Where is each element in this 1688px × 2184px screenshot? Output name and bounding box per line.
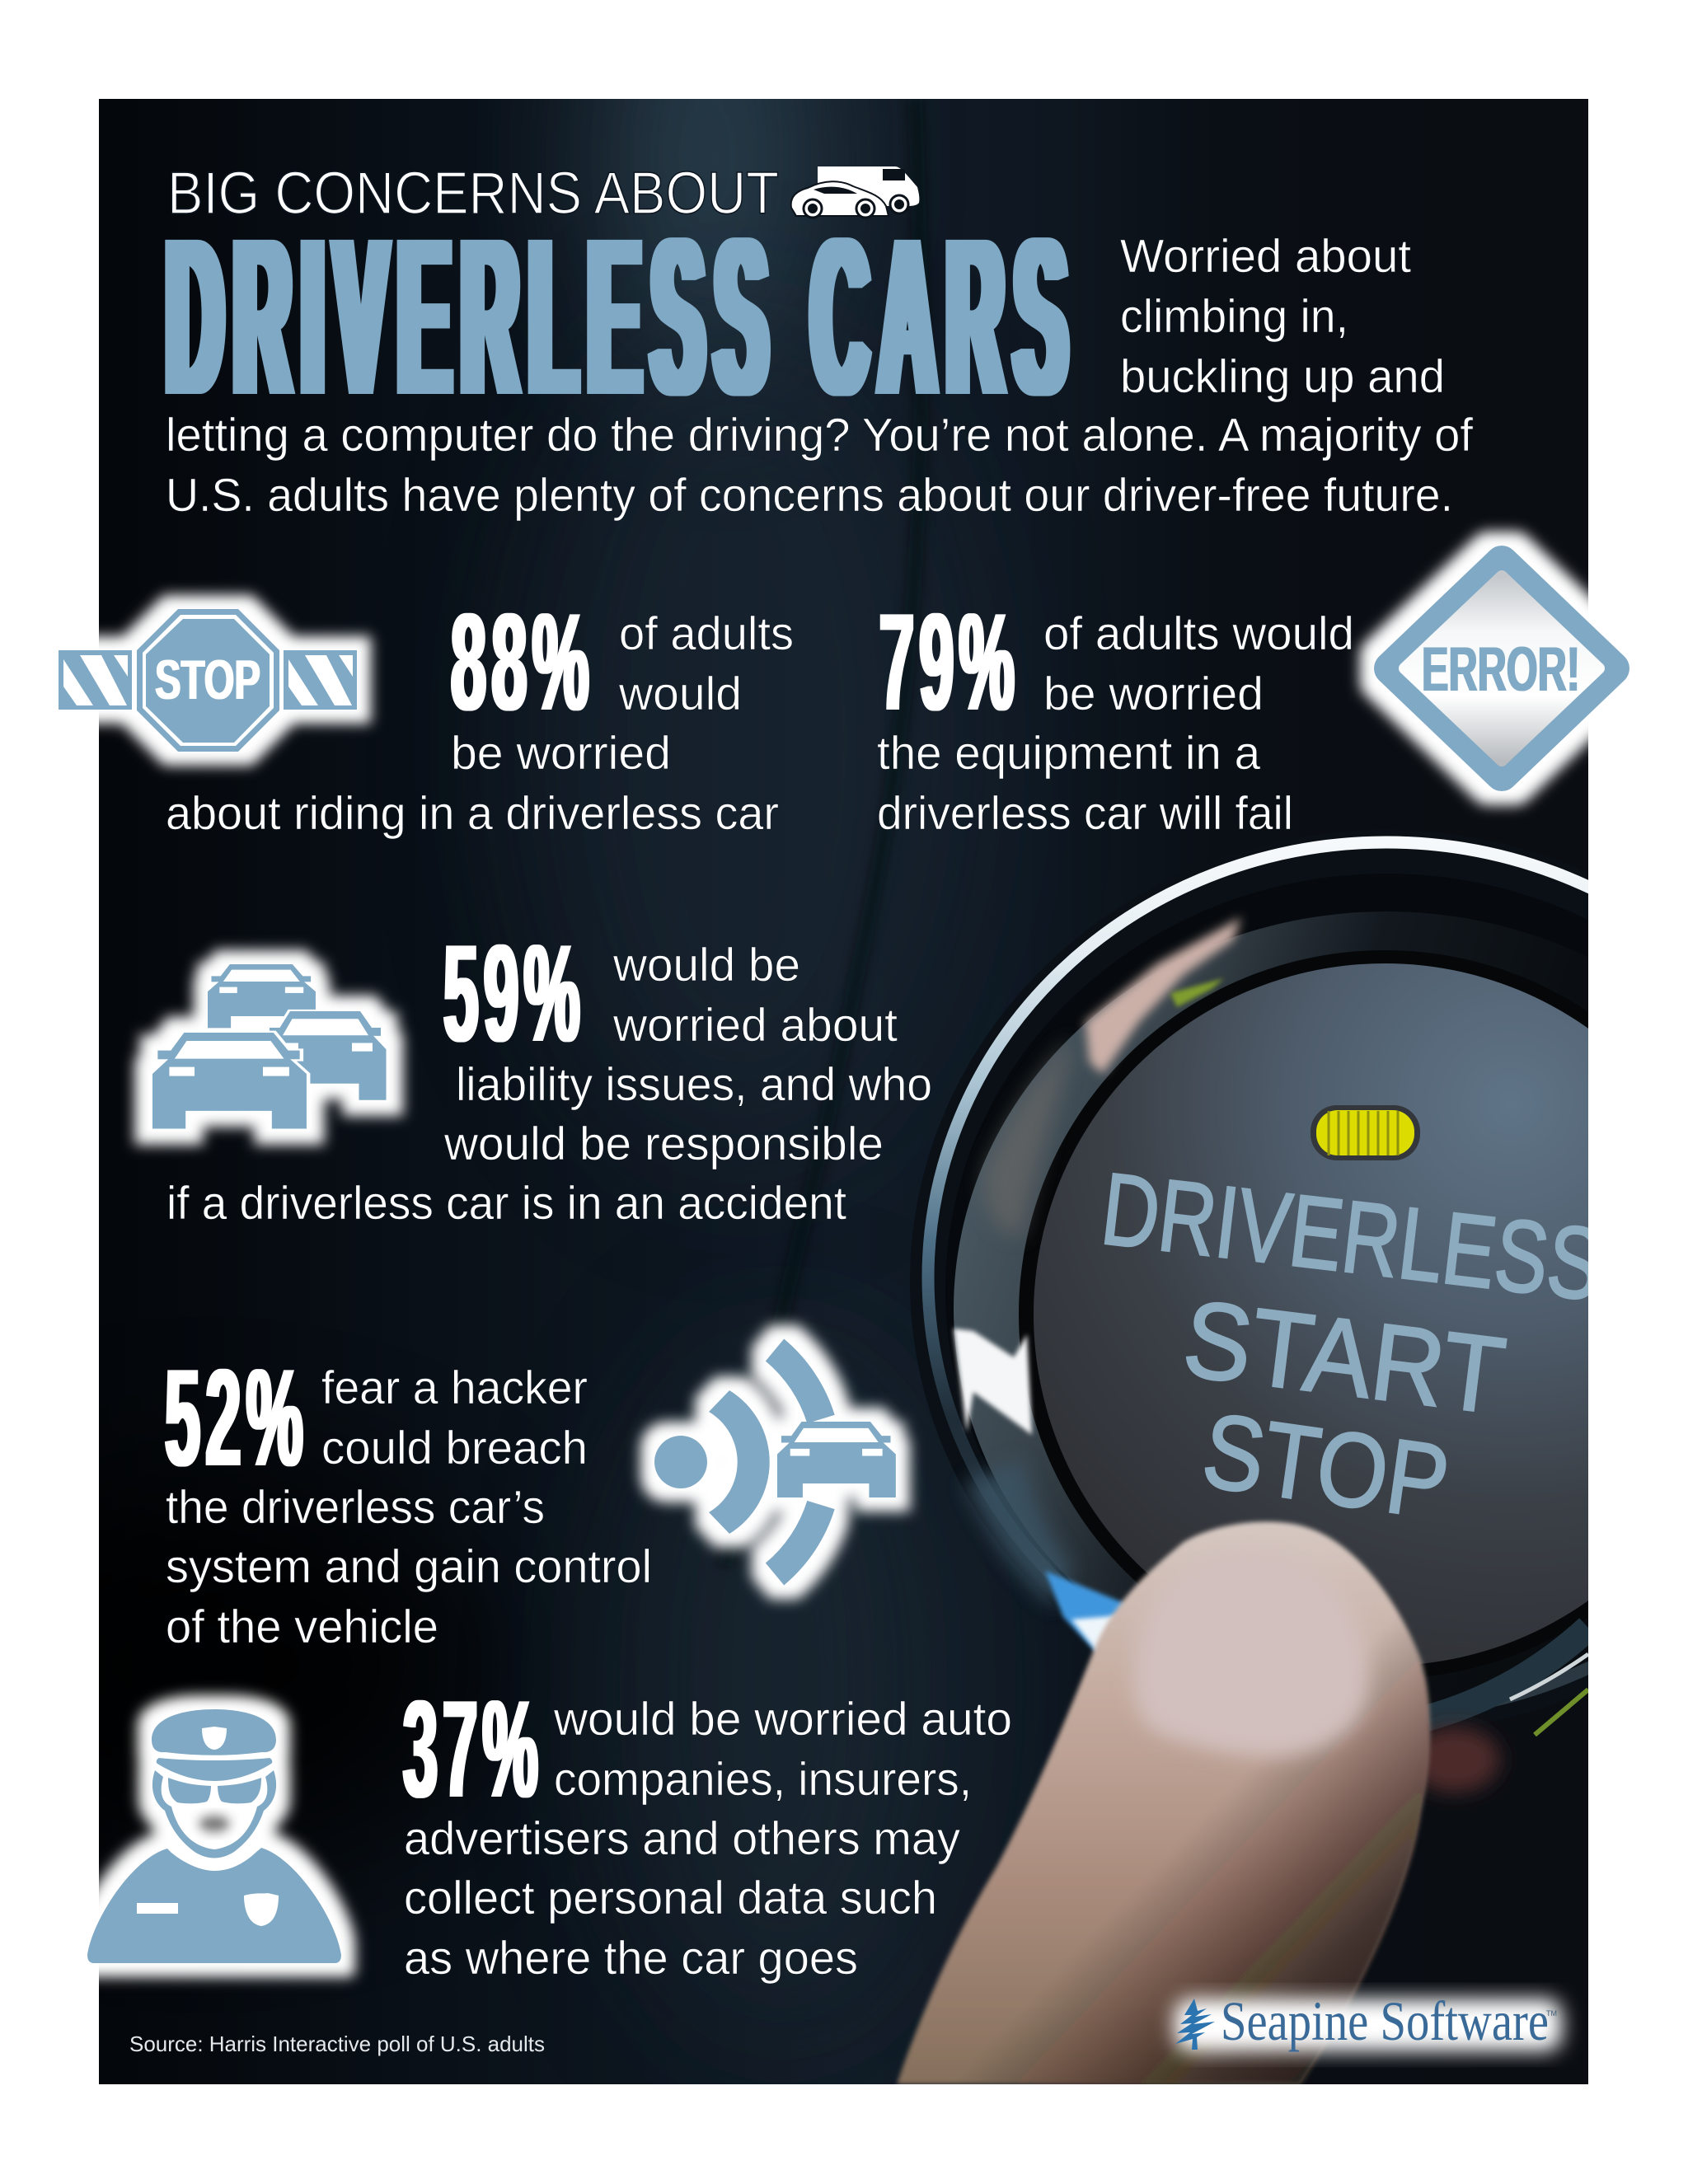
stat: 52 percent: the driverless car’s xyxy=(166,1481,545,1534)
stat: 37 percent: would be worried auto xyxy=(553,1693,1012,1746)
icon: error diamond sign xyxy=(1390,562,1613,775)
logo: Seapine Software: Seapine Software xyxy=(1221,1990,1549,2052)
stat: 88 percent: would xyxy=(618,668,742,720)
stat: 79 percent: be worried xyxy=(1043,668,1264,720)
stat: 88 percent: 88% xyxy=(451,584,594,739)
stat: 37 percent: advertisers and others may xyxy=(404,1812,960,1865)
stat: 79 percent: driverless car will fail xyxy=(877,787,1293,840)
stat: 59 percent: if a driverless car is in an accident xyxy=(166,1177,846,1230)
icon: stop sign with barriers xyxy=(59,609,357,752)
photo: start stop push button xyxy=(895,836,1588,2084)
stat: 59 percent: worried about xyxy=(612,999,898,1052)
photo: yellow indicator light xyxy=(1311,1105,1420,1160)
source note: Source: Harris Interactive poll of U.S. adults xyxy=(129,2032,545,2056)
intro text: letting a computer do the driving? You’re not alone. A majority of xyxy=(166,409,1473,462)
stat: 52 percent xyxy=(165,1340,652,1653)
icon: police officer xyxy=(87,1709,341,1963)
photo: lower chrome ring, second finger and green streak xyxy=(1409,1628,1588,1793)
photo: finger pressing button xyxy=(897,1521,1429,2084)
stat: 88 percent: of adults xyxy=(619,607,794,660)
stat: 79 percent xyxy=(877,584,1354,840)
stat: 59 percent: would be responsible xyxy=(443,1118,884,1170)
stat: 52 percent: fear a hacker xyxy=(321,1361,588,1414)
intro text: Worried about xyxy=(1120,230,1411,283)
icon: stop sign with barriers: STOP xyxy=(155,649,260,711)
stat: 88 percent: about riding in a driverless car xyxy=(166,787,779,840)
icon: three cars in traffic xyxy=(152,964,386,1129)
stat: 52 percent: system and gain control xyxy=(166,1540,652,1593)
stat: 37 percent xyxy=(403,1671,1012,1985)
icon: error diamond sign: ERROR! xyxy=(1422,635,1580,705)
photo: button label xyxy=(1104,1172,1588,1515)
stat: 52 percent: of the vehicle xyxy=(166,1601,438,1653)
stat: 88 percent xyxy=(166,584,794,840)
stat: 37 percent: companies, insurers, xyxy=(554,1753,972,1806)
stat: 79 percent: 79% xyxy=(879,584,1020,739)
stat: 37 percent: collect personal data such xyxy=(404,1872,937,1924)
stat: 59 percent: 59% xyxy=(443,916,585,1071)
photo: button disc xyxy=(1034,963,1588,1663)
stat: 79 percent: the equipment in a xyxy=(877,727,1260,780)
intro text xyxy=(166,230,1473,522)
stat: 88 percent: be worried xyxy=(451,727,671,780)
title: big concerns about: BIG CONCERNS ABOUT xyxy=(167,161,779,227)
stat: 37 percent: 37% xyxy=(403,1671,543,1826)
stat: 59 percent: liability issues, and who xyxy=(456,1058,932,1111)
stat: 52 percent: 52% xyxy=(165,1340,308,1495)
photo: chrome reflections xyxy=(954,917,1241,1655)
stat: 79 percent: of adults would xyxy=(1043,607,1354,660)
intro text: U.S. adults have plenty of concerns about our driver-free future. xyxy=(166,469,1453,522)
icon: wireless signal hacking a car xyxy=(654,1350,896,1574)
photo: button label: START xyxy=(1178,1277,1512,1436)
stat: 37 percent: as where the car goes xyxy=(404,1932,858,1985)
photo: button label: STOP xyxy=(1196,1391,1456,1542)
icon: van and car xyxy=(791,166,919,218)
stat: 52 percent: could breach xyxy=(321,1422,588,1474)
logo: Seapine Software: TM xyxy=(1546,2009,1557,2018)
intro text: climbing in, xyxy=(1120,290,1348,343)
stat: 59 percent: would be xyxy=(612,939,800,991)
stat: 59 percent xyxy=(166,916,932,1230)
intro text: buckling up and xyxy=(1120,350,1445,403)
